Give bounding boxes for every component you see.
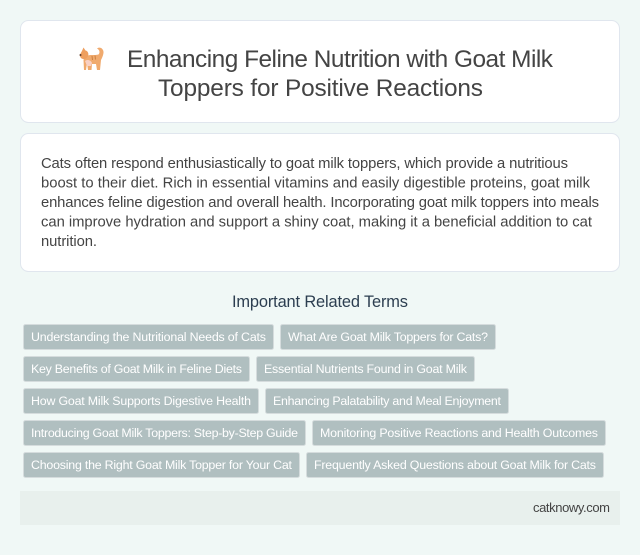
heading: important related terms: Important Related Terms: [232, 293, 408, 311]
tag: [280, 324, 496, 350]
panel: title card: [20, 20, 620, 122]
tag: [24, 324, 274, 350]
tag: Frequently Asked Questions about Goat Milk for Cats: [314, 458, 596, 472]
tag: Monitoring Positive Reactions and Health Outcomes: [320, 426, 598, 440]
title: Enhancing Feline Nutrition with Goat Milk: [127, 46, 554, 73]
tag: [24, 452, 300, 478]
title: Toppers for Positive Reactions: [158, 75, 483, 102]
tag: What Are Goat Milk Toppers for Cats?: [288, 330, 488, 344]
footer: [20, 491, 620, 525]
tag: Introducing Goat Milk Toppers: Step-by-Step Guide: [31, 426, 298, 440]
panel: description: [20, 134, 620, 272]
footer text: source: catknowy.com: [533, 500, 610, 515]
tag: Understanding the Nutritional Needs of Cats: [31, 330, 266, 344]
tag: [256, 356, 474, 382]
tag: [24, 388, 258, 414]
tag: Essential Nutrients Found in Goat Milk: [264, 362, 468, 376]
tag: [24, 420, 306, 446]
text block: description paragraph: Cats often respond enthusiastically to goat milk toppers, which provide a nutritious: [41, 156, 568, 172]
text block: description paragraph: boost to their diet. Rich in essential vitamins and easily digestible proteins, goat milk: [41, 176, 591, 192]
text block: description paragraph: can improve hydration and support a shiny coat, making it a beneficial addition to cat: [41, 214, 592, 230]
tag: [306, 452, 604, 478]
panel: related term tags: [24, 324, 606, 478]
tag: Key Benefits of Goat Milk in Feline Diets: [31, 362, 242, 376]
tag: [266, 388, 508, 414]
text block: description paragraph: nutrition.: [41, 234, 97, 250]
text block: description paragraph: enhances feline digestion and overall health. Incorporating goat milk toppers into meals: [41, 195, 599, 211]
icon: cat: [80, 48, 104, 70]
tag: How Goat Milk Supports Digestive Health: [31, 394, 251, 408]
tag: [24, 356, 250, 382]
tag: Choosing the Right Goat Milk Topper for Your Cat: [31, 458, 293, 472]
tag: Enhancing Palatability and Meal Enjoyment: [273, 394, 502, 408]
tag: [312, 420, 606, 446]
